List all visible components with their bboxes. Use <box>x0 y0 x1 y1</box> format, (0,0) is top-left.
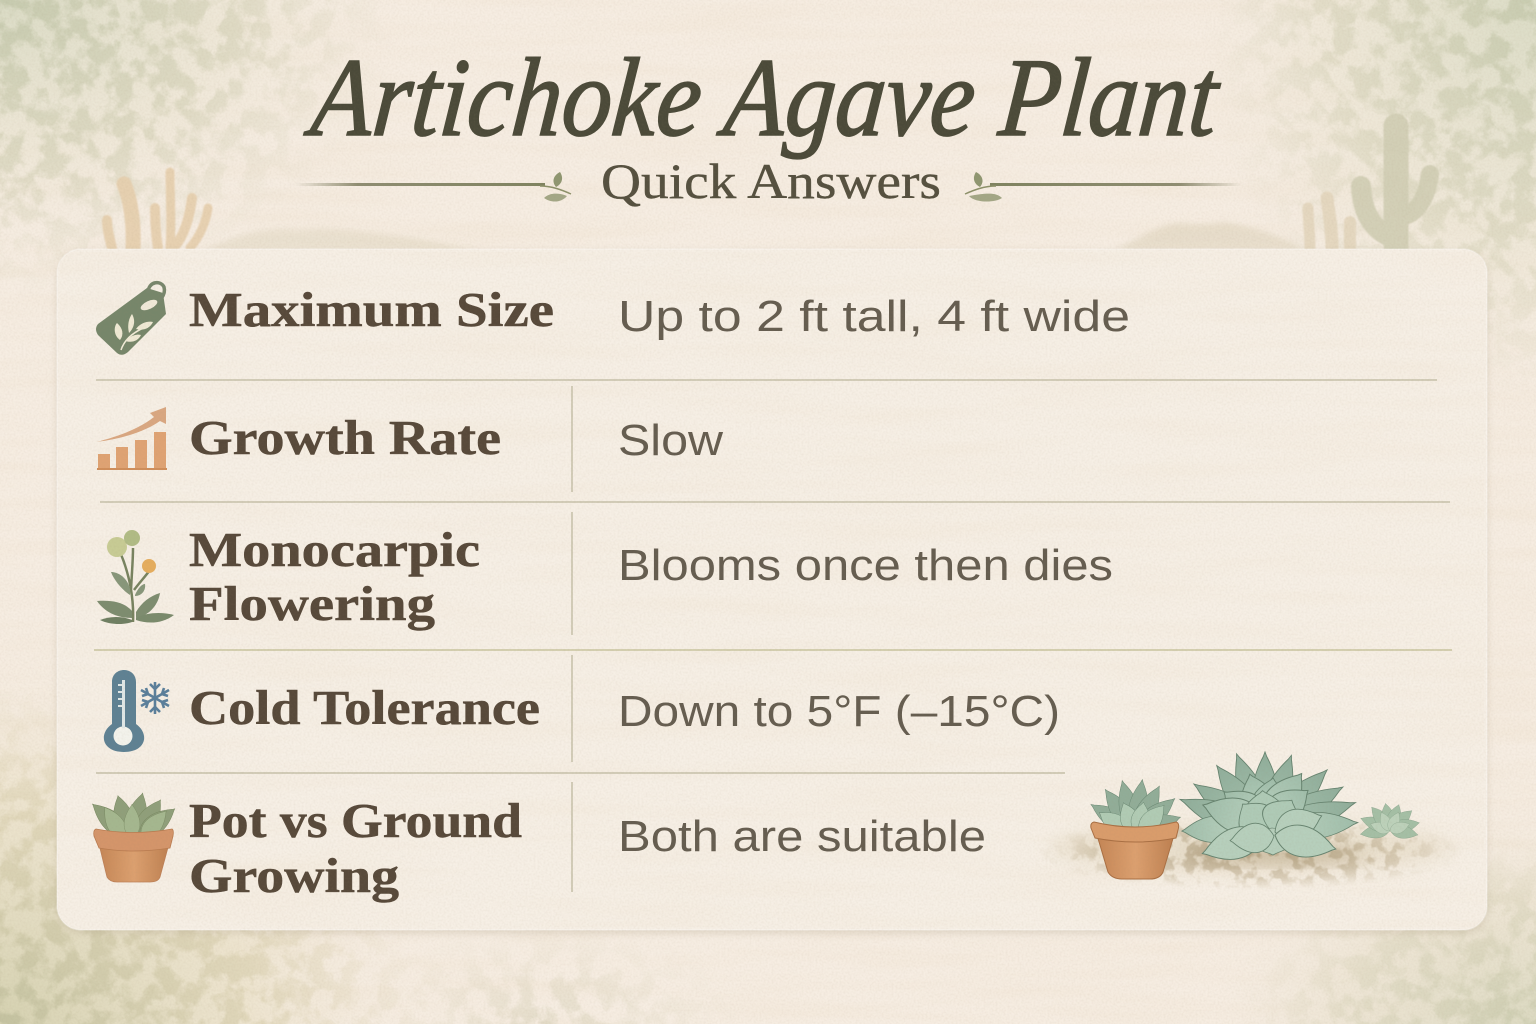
icon: growth chart <box>96 407 167 469</box>
icon: thermometer and snowflake <box>104 670 169 752</box>
label: Growth Rate <box>189 410 501 465</box>
icon: plant tag <box>96 283 166 355</box>
value: Blooms once then dies <box>618 541 1113 590</box>
label line 2: Flowering <box>189 576 436 631</box>
row dividers <box>94 380 1452 892</box>
illustration: potted and ground agaves <box>1035 749 1465 890</box>
subtitle with leaf rules <box>295 153 1242 209</box>
row: growth rate <box>96 407 723 469</box>
distant hills <box>205 196 1305 250</box>
cactus left <box>107 172 208 248</box>
label: Pot vs Ground <box>189 793 522 848</box>
subtitle text: Quick Answers <box>601 153 941 209</box>
label: Maximum Size <box>189 282 554 337</box>
potted agave <box>1086 778 1183 879</box>
value: Both are suitable <box>618 812 986 861</box>
row: monocarpic flowering <box>97 522 1113 631</box>
label: Monocarpic <box>189 522 480 577</box>
soil <box>1035 815 1465 890</box>
icon: flowering plant <box>97 530 174 624</box>
value: Down to 5°F (–15°C) <box>618 687 1060 736</box>
large agave <box>1175 749 1360 868</box>
value: Up to 2 ft tall, 4 ft wide <box>618 292 1130 341</box>
icon: potted succulent <box>86 791 181 882</box>
label line 2: Growing <box>189 848 400 903</box>
row: maximum size <box>96 282 1130 355</box>
value: Slow <box>618 416 723 465</box>
label: Cold Tolerance <box>189 680 540 735</box>
title: Artichoke Agave Plant <box>301 36 1225 160</box>
small agave <box>1358 802 1421 841</box>
panel: quick answers table <box>57 249 1487 933</box>
row: cold tolerance <box>104 670 1060 752</box>
cactus right <box>1308 126 1430 248</box>
row: pot vs ground growing <box>86 791 986 903</box>
